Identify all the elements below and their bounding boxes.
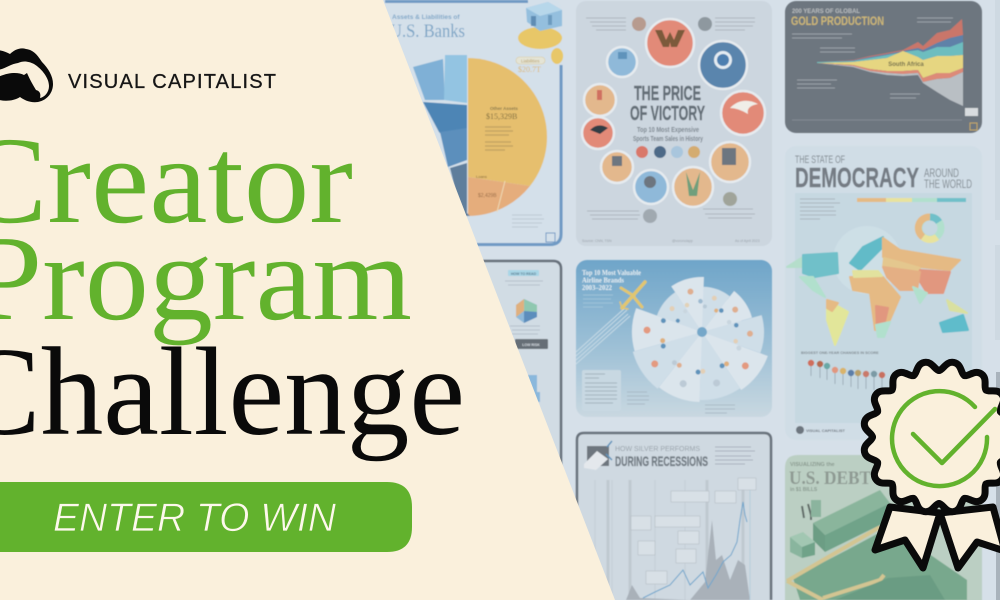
icon: small league badges xyxy=(636,146,700,158)
panel: state of democracy infographic xyxy=(785,146,982,440)
chart: gold assets half circle xyxy=(468,58,547,186)
icon: owner portraits xyxy=(632,17,737,223)
title: gold production: 200 YEARS OF GLOBAL xyxy=(792,9,860,15)
title: the price of victory: THE PRICE xyxy=(634,83,701,105)
chart: silver price and recessions xyxy=(595,478,756,600)
title: how silver performs: DURING RECESSIONS xyxy=(615,453,708,469)
logo: visual capitalist xyxy=(0,48,276,102)
panel: how to read infographic: HOW TO READ xyxy=(511,272,537,276)
icon: small visual capitalist logo xyxy=(796,426,846,434)
title: gold production: GOLD PRODUCTION xyxy=(791,14,884,28)
icon: award rosette xyxy=(862,360,1000,568)
ribbons xyxy=(875,507,1000,568)
icon: bank building with coins xyxy=(518,2,563,64)
title: visualizing the US debt: VISUALIZING the xyxy=(790,462,835,468)
icon: logo mark xyxy=(0,48,53,102)
panel: U.S. banks infographic: $15,329B xyxy=(486,112,517,121)
title: visualizing the US debt xyxy=(789,462,871,493)
chart: biggest one-year changes: BIGGEST ONE-YEAR CHANGES IN SCORE xyxy=(801,351,879,355)
panel: gold production infographic xyxy=(785,1,982,133)
text: visual capitalist wordmark: VISUAL CAPITALIST xyxy=(68,71,276,93)
panel: U.S. banks infographic: Assets & Liabilities of xyxy=(392,14,460,21)
panel: U.S. banks infographic: Other Assets xyxy=(490,106,518,111)
panel: US debt infographic xyxy=(785,455,982,600)
title: state of democracy: THE STATE OF xyxy=(795,154,845,166)
panel: U.S. banks infographic: Liabilities xyxy=(521,58,540,64)
panel: price of victory infographic xyxy=(576,1,772,246)
icon: small visual capitalist logo: VISUAL CAPITALIST xyxy=(806,428,846,433)
panel: U.S. banks infographic xyxy=(340,0,563,246)
chart: airline brand wheel xyxy=(630,274,770,405)
text block: note panel xyxy=(582,370,621,411)
title: the price of victory xyxy=(630,83,705,143)
title: state of democracy: THE WORLD xyxy=(924,177,972,191)
title: the price of victory: Top 10 Most Expensive xyxy=(637,127,699,134)
panel: right edge cards xyxy=(995,0,1000,600)
panel: price of victory infographic: As of April 2023 xyxy=(735,239,760,243)
icon: team logos xyxy=(590,30,758,196)
title: state of democracy: DEMOCRACY xyxy=(795,162,919,193)
chart: team sale circles xyxy=(582,19,765,207)
title: most valuable airline brands: Top 10 Most Valuable xyxy=(582,269,641,277)
callouts: recession labels xyxy=(631,478,756,584)
chart: biggest one-year changes xyxy=(801,351,885,391)
chart: population donut xyxy=(918,217,941,240)
check mark in circle xyxy=(892,391,995,486)
panel: U.S. banks infographic: Loans xyxy=(476,174,487,179)
title: creator program challenge xyxy=(0,112,465,462)
title: state of democracy: AROUND xyxy=(924,166,959,180)
panel: U.S. banks infographic: $2,429B xyxy=(478,193,497,199)
title: visualizing the US debt: U.S. DEBT xyxy=(789,468,871,489)
decoration: contrails xyxy=(576,308,630,364)
chart: gold streamgraph xyxy=(817,19,963,106)
title: most valuable airline brands xyxy=(582,269,641,292)
legend: regime bar xyxy=(857,198,966,202)
panel: how to read infographic: LOW RISK xyxy=(522,343,540,347)
panel: U.S. banks infographic: $20.7T xyxy=(518,65,541,74)
icon: silver bar xyxy=(584,441,612,470)
title: visualizing the US debt: in $1 BILLS xyxy=(790,487,818,493)
illustration: stacks of bills xyxy=(787,490,967,600)
title: gold production xyxy=(791,9,884,28)
button: enter to win: ENTER TO WIN xyxy=(53,496,336,540)
panel: price of victory infographic: Source: CNN, TSN xyxy=(582,239,612,243)
panel: how to read infographic xyxy=(460,260,561,470)
panel: cream angled background xyxy=(0,0,615,600)
panel: price of victory infographic: @voronoiapp xyxy=(672,239,693,243)
button: enter to win xyxy=(0,482,412,552)
panel: U.S. banks infographic: U.S. Banks xyxy=(390,21,465,42)
chart: world map xyxy=(787,237,968,345)
title: how silver performs xyxy=(615,446,708,469)
scalloped seal xyxy=(862,360,1000,514)
icon: colored hexagon xyxy=(516,299,537,323)
panel: airline brands infographic xyxy=(576,260,772,417)
title: most valuable airline brands: 2003–2022 xyxy=(582,284,612,292)
icon: gold airplane xyxy=(620,282,645,309)
chart: gold streamgraph: South Africa xyxy=(888,62,924,68)
title: most valuable airline brands: Airline Brands xyxy=(582,276,624,284)
title: the price of victory: OF VICTORY xyxy=(630,103,705,125)
panel: silver during recessions infographic xyxy=(576,432,772,600)
title: how silver performs: HOW SILVER PERFORMS xyxy=(615,446,700,453)
title: the price of victory: Sports Team Sales in History xyxy=(633,136,703,143)
